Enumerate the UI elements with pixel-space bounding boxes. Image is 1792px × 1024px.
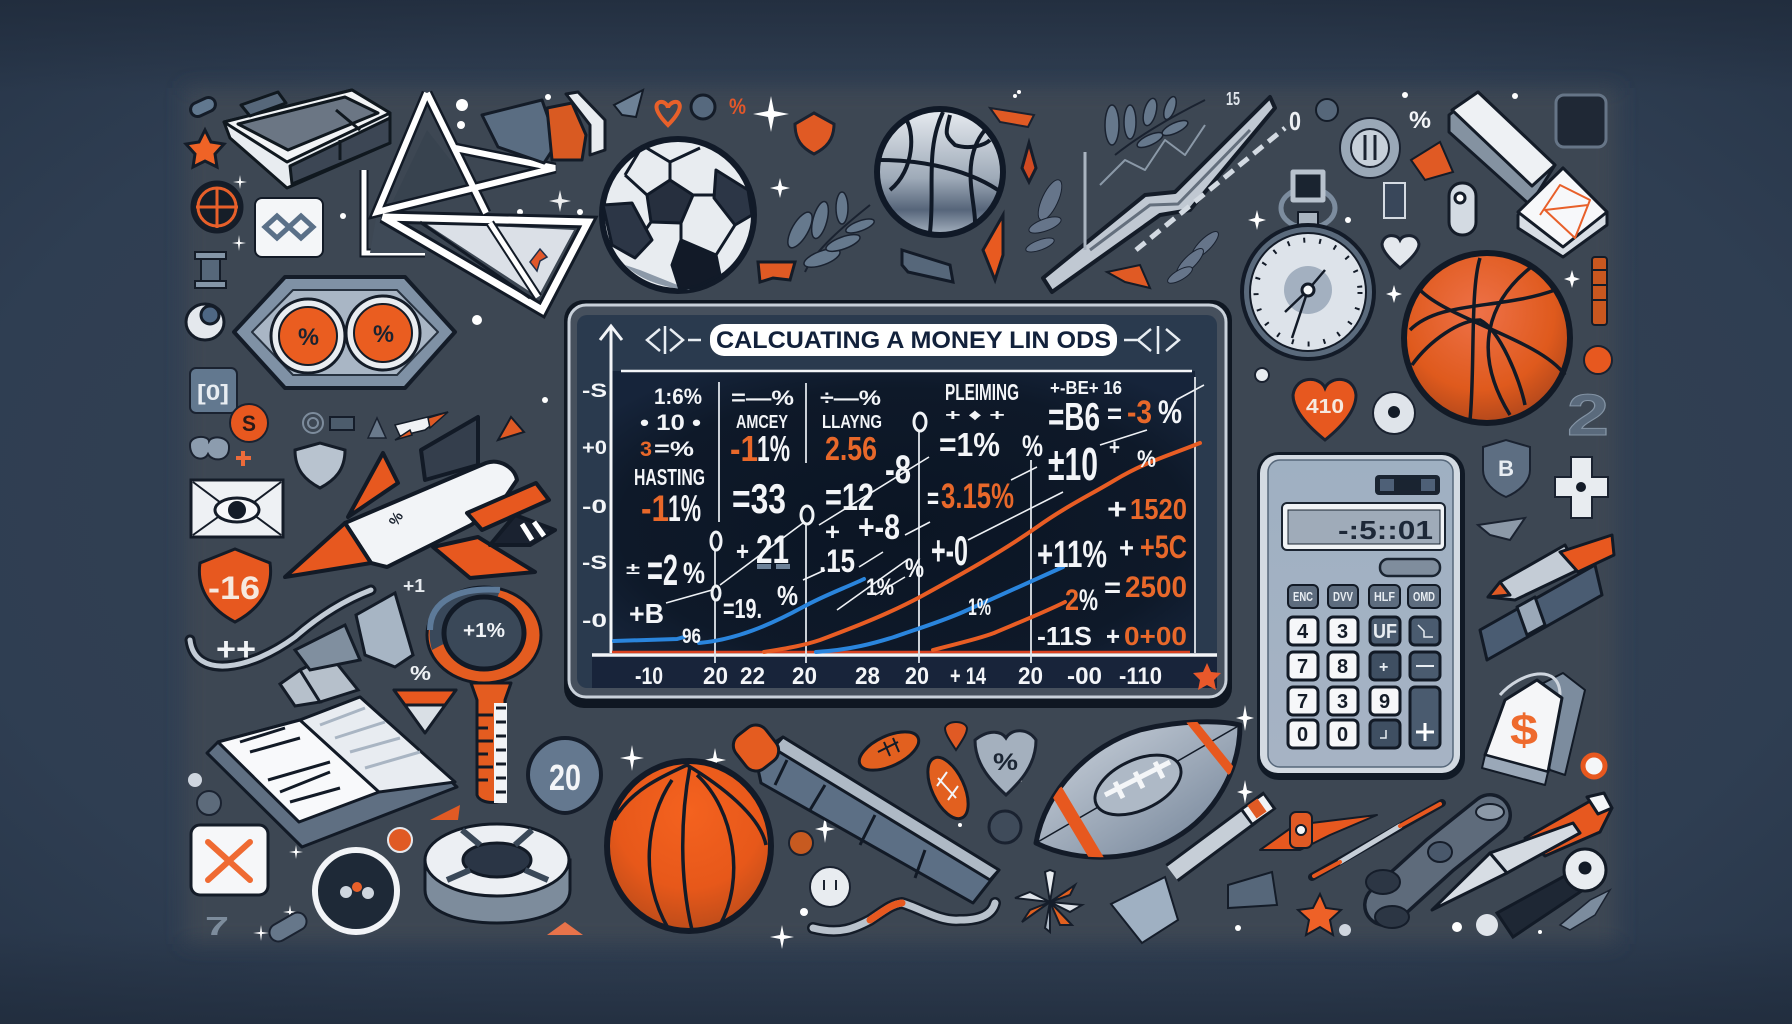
calculator number keys: 4 [1297, 621, 1309, 643]
icon: bracket zero screen: [0] [197, 380, 229, 405]
icon: crayon [1488, 535, 1614, 600]
icon: open book [207, 697, 457, 847]
icon: dark capsule [902, 250, 953, 282]
icon: steel cylinder [728, 720, 999, 903]
icon: leaf sprig top [1105, 95, 1205, 155]
column 5 figures: + [1106, 621, 1120, 651]
grey blocks [757, 564, 790, 569]
column 1 figures: ± [626, 561, 640, 578]
icon: envelope with eye [191, 480, 283, 537]
calculator function keys: HLF [1374, 589, 1395, 604]
icon: orange peg stick [1592, 257, 1607, 325]
column 5 figures: ±10 [1048, 438, 1098, 490]
y axis labels: -0 [582, 497, 607, 518]
icon: bent hook [813, 903, 995, 931]
column 2 figures: + [736, 536, 749, 566]
icon: leaf cluster bottom [1560, 890, 1610, 930]
icon: orange ticket [990, 108, 1034, 127]
icon: orange small disc [1584, 346, 1612, 374]
icon: 20 shield [528, 738, 601, 813]
icon: orange road badge -16 [199, 549, 271, 622]
icon: white cross [1555, 457, 1608, 518]
x axis labels [635, 663, 1162, 690]
calculator small pill [1380, 559, 1440, 576]
column 4 figures: PLEIMING [945, 379, 1019, 405]
icon: grey triangle [368, 418, 386, 438]
icon: percent plate: % [298, 324, 319, 351]
column 2 figures: AMCEY [736, 412, 788, 432]
icon: stopwatch [1242, 172, 1374, 359]
icon: percent plate [234, 277, 455, 388]
icon: mini football two [920, 751, 976, 825]
icon: orange plus [236, 451, 251, 466]
text: orange percent: % [729, 94, 746, 119]
column 3 figures: -8 [885, 448, 911, 492]
column 1 figures: =2 [647, 546, 678, 595]
icon: metal scissors [1366, 804, 1504, 928]
column 5 figures: % [1079, 584, 1098, 617]
icon: percent heart shield: % [993, 749, 1018, 776]
icon: small swirl token [197, 791, 221, 815]
icon: X card [191, 825, 268, 895]
icon: ribbon swirl [190, 590, 371, 666]
y axis labels: -S [582, 381, 607, 402]
icon: orange heart outline [656, 102, 680, 125]
column 3 figures: =12 [825, 477, 874, 519]
column 2 figures: =33 [732, 475, 786, 522]
column 3 figures: % [905, 553, 924, 583]
column 5 figures: = [1104, 572, 1121, 603]
calculator number keys [1288, 617, 1400, 748]
column 1 figures: HASTING [634, 464, 705, 490]
column 2 figures: =—% [731, 387, 794, 410]
icon: soccer ball [602, 139, 754, 291]
icon: paint brush [1312, 803, 1442, 877]
y axis labels: +0 [582, 438, 607, 459]
icon: leaf sprig right [1165, 228, 1222, 286]
icon: price tag [1482, 673, 1585, 785]
icon: orange pile [547, 922, 583, 935]
column 3 figures [819, 387, 924, 601]
icon: grey gadget [482, 92, 605, 163]
chart grid verticals [715, 377, 1195, 663]
chart nodes [711, 413, 926, 600]
icon: grey basketball [877, 109, 1003, 235]
column 4 figures: + ♦ + [945, 407, 1005, 424]
column 1 figures: • 10 • [640, 410, 701, 435]
calculator operator keys: UF [1373, 621, 1397, 643]
calculator number keys: 9 [1379, 691, 1390, 713]
heading pill: CALCUATING A MONEY LIN ODS [716, 327, 1111, 354]
text: rail fifteen: 15 [1226, 89, 1240, 109]
board frame [564, 300, 1232, 708]
icon: mini football one [854, 724, 924, 778]
calculator number keys: 7 [1297, 656, 1308, 678]
column 4 figures: 1% [968, 594, 991, 621]
x axis labels: -00 [1067, 663, 1102, 690]
column 5 figures: % [1158, 394, 1182, 430]
icon: blue round badge [691, 95, 715, 119]
icon: price tag: $ [1510, 706, 1538, 755]
icon: orange sliver [430, 805, 460, 820]
heading left ornament [647, 326, 701, 354]
column 1 figures: -1 [641, 488, 669, 529]
column 4 figures: +-0 [931, 527, 968, 574]
column 5 figures: +-BE+ 16 [1050, 378, 1122, 398]
chart background [611, 371, 1195, 654]
calculator display [1282, 503, 1445, 550]
x axis labels: 22 [740, 663, 765, 690]
column 3 figures: 2.56 [825, 430, 877, 467]
icon: white eraser bar [1449, 92, 1555, 205]
icon: ring with molecules [315, 850, 397, 932]
column 5 figures: +5C [1140, 529, 1187, 565]
column 1 figures: +B [629, 598, 664, 629]
calculator function keys [1288, 585, 1440, 608]
column 5 figures: % [1137, 446, 1156, 473]
icon: laurel sprig [783, 192, 876, 272]
icon: magnifier with ruler: +1% [463, 620, 505, 642]
icon: bracket zero screen [190, 368, 237, 413]
icon: white cube [1518, 168, 1607, 257]
icon: grey shard [614, 90, 643, 117]
calculator number keys: 0 [1297, 724, 1308, 746]
icon: white heart [1382, 236, 1419, 268]
icon: 20 shield: 20 [549, 757, 581, 798]
text: sparkle plus: ++ [216, 631, 256, 667]
text: seven mark: 7 [205, 911, 229, 941]
x axis labels: 20 [1018, 663, 1043, 690]
x axis labels: + 14 [950, 663, 986, 690]
text: rail zero: 0 [1289, 106, 1301, 136]
column 2 figures [723, 387, 798, 624]
column 2 figures: % [777, 580, 798, 611]
icon: grey football [1036, 720, 1240, 862]
icon: spiral and block [303, 413, 354, 433]
column 4 figures: = [927, 482, 939, 515]
icon: orange star top left [186, 130, 224, 167]
calculator operator keys [1370, 617, 1440, 748]
icon: large rocket [285, 417, 555, 578]
calculator function keys: DVV [1333, 589, 1353, 604]
icon: red shard [1022, 143, 1036, 182]
calculator function keys: OMD [1413, 589, 1435, 604]
column 3 figures: +-8 [858, 508, 900, 547]
icon: percent heart shield [975, 731, 1036, 795]
icon: dark pill [1384, 183, 1405, 218]
column 5 figures: -3 [1127, 394, 1152, 430]
heading right ornament [1124, 326, 1179, 354]
column 5 figures: =B6 [1048, 396, 1100, 439]
column 2 figures: 21 [756, 528, 789, 572]
column 2 figures: 1% [757, 428, 790, 469]
x axis labels: 28 [855, 663, 880, 690]
icon: leaf sprig left [1024, 177, 1067, 255]
icon: oval knob [186, 304, 224, 340]
column 5 figures: -11S [1037, 621, 1092, 651]
icon: B shield [1483, 440, 1530, 497]
icon: thread spool [195, 252, 226, 288]
icon: orange dot token [388, 828, 412, 852]
column 3 figures: 1% [866, 574, 894, 601]
icon: orange splat [758, 262, 795, 282]
icon: leaf cluster right [1478, 518, 1525, 540]
icon: white ball [810, 867, 850, 907]
icon: orange ring token [1583, 755, 1605, 777]
connector lines [666, 385, 1204, 610]
column 5 figures: +11% [1037, 534, 1107, 576]
y axis labels [582, 381, 607, 632]
icon: orange shard [1107, 265, 1150, 288]
icon: magnifier with ruler [427, 587, 541, 803]
calculator number keys: 3 [1337, 621, 1348, 643]
icon: diagonal chart rail [1043, 97, 1285, 292]
column 5 figures: + [1107, 494, 1127, 526]
calculator [1257, 452, 1465, 780]
column 5 figures: = [1107, 398, 1122, 429]
icon: dark sphere [989, 811, 1021, 843]
icon: silver medal [1340, 118, 1400, 178]
icon: grey cloud [190, 437, 229, 459]
icon: paper clip [188, 95, 218, 119]
column 2 figures: =19. [723, 593, 762, 624]
icon: white capsule [1449, 183, 1476, 235]
column 1 figures: =% [654, 438, 694, 461]
column 3 figures: ÷—% [820, 387, 881, 410]
icon: tyre ring [425, 824, 570, 923]
calculator function keys: ENC [1293, 589, 1313, 604]
y axis labels: -0 [582, 611, 607, 632]
icon: chevron [394, 690, 456, 733]
icon: orange basketball [1404, 253, 1570, 423]
icon: orange shield top [795, 113, 834, 154]
icon: percent plate: % [373, 321, 394, 348]
x axis labels: 20 [792, 663, 817, 690]
icon: orange basketball bottom [607, 761, 771, 931]
icon: B shield: B [1498, 456, 1514, 481]
column 1 figures: 1% [668, 488, 701, 529]
icon: heart with 410 [1293, 379, 1356, 440]
icon: dark tile [1556, 95, 1606, 147]
text: ribbon percent: % [410, 663, 431, 685]
orange line series [764, 443, 1200, 652]
x axis labels: 20 [703, 663, 728, 690]
icon: infinity card [255, 198, 323, 257]
icon: small white dot [1255, 368, 1269, 382]
x axis labels: -110 [1119, 663, 1162, 690]
column 5 figures: 2500 [1125, 571, 1187, 604]
column 1 figures: 3 [640, 438, 652, 461]
y axis labels: -S [582, 553, 607, 574]
icon: orange coin [789, 831, 813, 855]
column 1 figures: 96 [682, 625, 701, 648]
blue line series [614, 567, 1063, 652]
icon: note paper [356, 593, 413, 667]
icon: orange square [1411, 142, 1453, 180]
icon: target emblem [192, 182, 242, 232]
column 1 figures: % [683, 557, 705, 590]
icon: metal blocks [280, 625, 360, 706]
icon: orange peak [498, 417, 524, 440]
column 2 figures: -1 [730, 428, 758, 469]
calculator solar strip [1375, 475, 1440, 495]
icon: small rocket [395, 412, 448, 440]
x axis labels: 20 [905, 663, 929, 690]
column 3 figures: .15 [819, 543, 855, 579]
column 5 figures: 1520 [1130, 494, 1187, 526]
icon: paper note [1111, 877, 1178, 943]
column 1 figures [626, 384, 705, 648]
icon: white stick [1172, 800, 1270, 873]
calculator number keys: 0 [1337, 724, 1348, 746]
icon: flower star [1015, 870, 1082, 932]
icon: grey bracket block [1228, 872, 1277, 908]
icon: marker body [1480, 565, 1602, 660]
column 5 figures: + [1119, 532, 1134, 565]
x axis labels: -10 [635, 663, 663, 690]
icon: road shield [295, 443, 345, 488]
column 4 figures: 3.15% [941, 477, 1014, 516]
icon: fountain pen [1432, 793, 1612, 910]
icon: orange plane [1260, 812, 1377, 850]
panel: chalkboard odds chart [564, 300, 1232, 708]
icon: orange blade [983, 215, 1003, 280]
icon: board star [1193, 663, 1221, 690]
column 3 figures: LLAYNG [822, 412, 882, 432]
column 5 figures [1037, 378, 1187, 651]
text: large two: 2 [1567, 383, 1609, 448]
calculator number keys: 3 [1337, 691, 1348, 713]
column 4 figures [927, 379, 1043, 621]
column 3 figures: + [825, 519, 840, 546]
column 1 figures: 1:6% [654, 384, 702, 409]
calculator number keys: 8 [1337, 656, 1348, 678]
icon: stacked books [224, 90, 390, 188]
text: percent: % [1409, 107, 1431, 134]
icon: dollar coin [230, 404, 268, 442]
calculator number keys: 7 [1297, 691, 1308, 713]
icon: dark utility knife [1476, 849, 1606, 937]
column 5 figures: 0+00 [1124, 621, 1187, 651]
chart axes [592, 326, 1217, 655]
column 4 figures: =1% [939, 426, 1000, 463]
icon: white ring [1373, 392, 1415, 434]
text: plus one mark: +1 [403, 576, 425, 596]
calculator display: -:5::01 [1338, 515, 1433, 545]
column 5 figures: 2 [1065, 584, 1079, 617]
icon: large rocket: % [386, 509, 407, 529]
icon: chain link [266, 909, 310, 945]
icon: folded triangles [364, 93, 588, 310]
icon: dollar coin: S [242, 411, 256, 436]
icon: orange map pin [945, 722, 967, 750]
icon: small dark coin [1316, 99, 1338, 121]
icon: orange road badge -16: -16 [208, 570, 260, 606]
calculator operator keys: + [1379, 659, 1388, 676]
icon: heart with 410: 410 [1306, 396, 1344, 418]
column 4 figures: % [1022, 430, 1043, 463]
scattered small dots and sparkles [188, 90, 1580, 949]
column 5 figures: + [1109, 435, 1120, 460]
icon: orange star bottom [1298, 894, 1341, 935]
